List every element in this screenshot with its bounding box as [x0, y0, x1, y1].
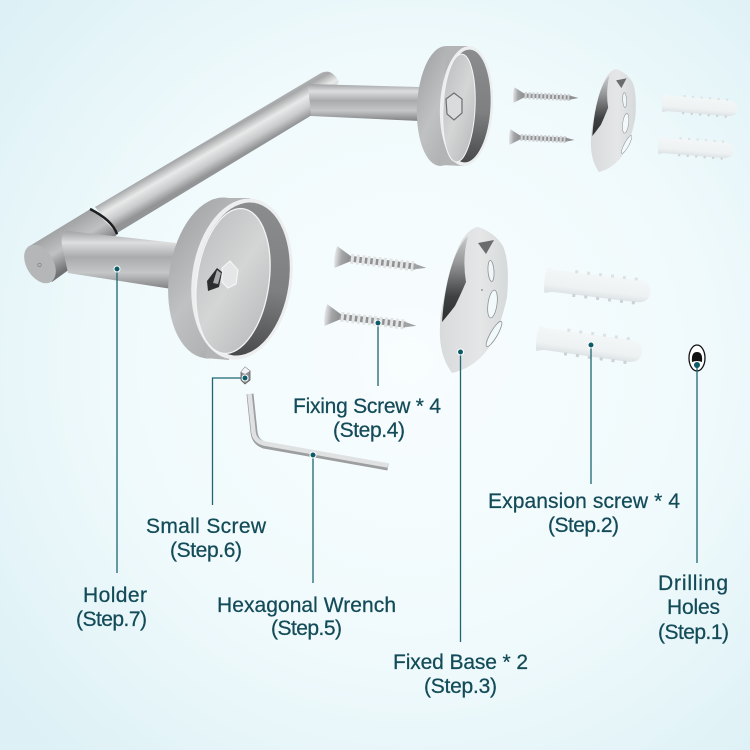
small fixing screw, lower	[509, 129, 575, 148]
label: drilling holes: Holes	[667, 596, 720, 619]
fixed base, large	[440, 227, 508, 373]
long bar	[95, 72, 339, 233]
hexagonal wrench	[250, 394, 388, 467]
hex bolt	[207, 261, 238, 291]
fixed base, small	[591, 69, 636, 172]
label: hexagonal wrench: (Step.5)	[271, 617, 342, 640]
label: drilling holes: Drilling	[658, 572, 728, 595]
large cup	[158, 191, 303, 366]
small expansion anchor, lower	[657, 136, 734, 160]
callout: hexagonal wrench	[217, 452, 396, 640]
expansion anchor, upper	[543, 267, 652, 306]
upper arm	[308, 84, 420, 121]
fixing screw, lower	[323, 304, 418, 337]
bar end cap	[18, 239, 62, 289]
small screw part	[241, 367, 250, 384]
label: small screw: Small Screw	[146, 515, 267, 538]
lower arm	[62, 231, 176, 289]
callout: expansion screw	[488, 342, 680, 537]
expansion anchor, lower	[535, 325, 644, 365]
label: small screw: (Step.6)	[170, 539, 242, 562]
small cup	[414, 45, 496, 167]
drilling hole icon	[689, 345, 705, 371]
callout: small screw	[146, 375, 267, 562]
label: holder: Holder	[83, 584, 147, 607]
label: expansion screw: (Step.2)	[548, 514, 619, 537]
label: fixed base: Fixed Base * 2	[393, 651, 528, 674]
callout: drilling holes	[658, 362, 729, 644]
label: fixing screw: Fixing Screw * 4	[293, 395, 441, 418]
label: holder: (Step.7)	[76, 608, 147, 631]
callout: fixed base	[393, 349, 528, 698]
callout: fixing screw	[293, 320, 441, 442]
label: fixing screw: (Step.4)	[333, 419, 405, 442]
fixing screw, upper	[333, 246, 428, 279]
small expansion anchor, upper	[661, 94, 738, 118]
label: fixed base: (Step.3)	[424, 675, 497, 698]
label: drilling holes: (Step.1)	[658, 621, 729, 644]
small fixing screw, upper	[513, 87, 579, 106]
callout: holder	[76, 266, 147, 631]
hex nut	[446, 93, 462, 120]
towel bar holder assembly	[18, 45, 496, 366]
bar joint ring	[90, 209, 117, 234]
label: hexagonal wrench: Hexagonal Wrench	[217, 594, 396, 617]
label: expansion screw: Expansion screw * 4	[488, 490, 680, 513]
thin bar section	[28, 208, 118, 282]
